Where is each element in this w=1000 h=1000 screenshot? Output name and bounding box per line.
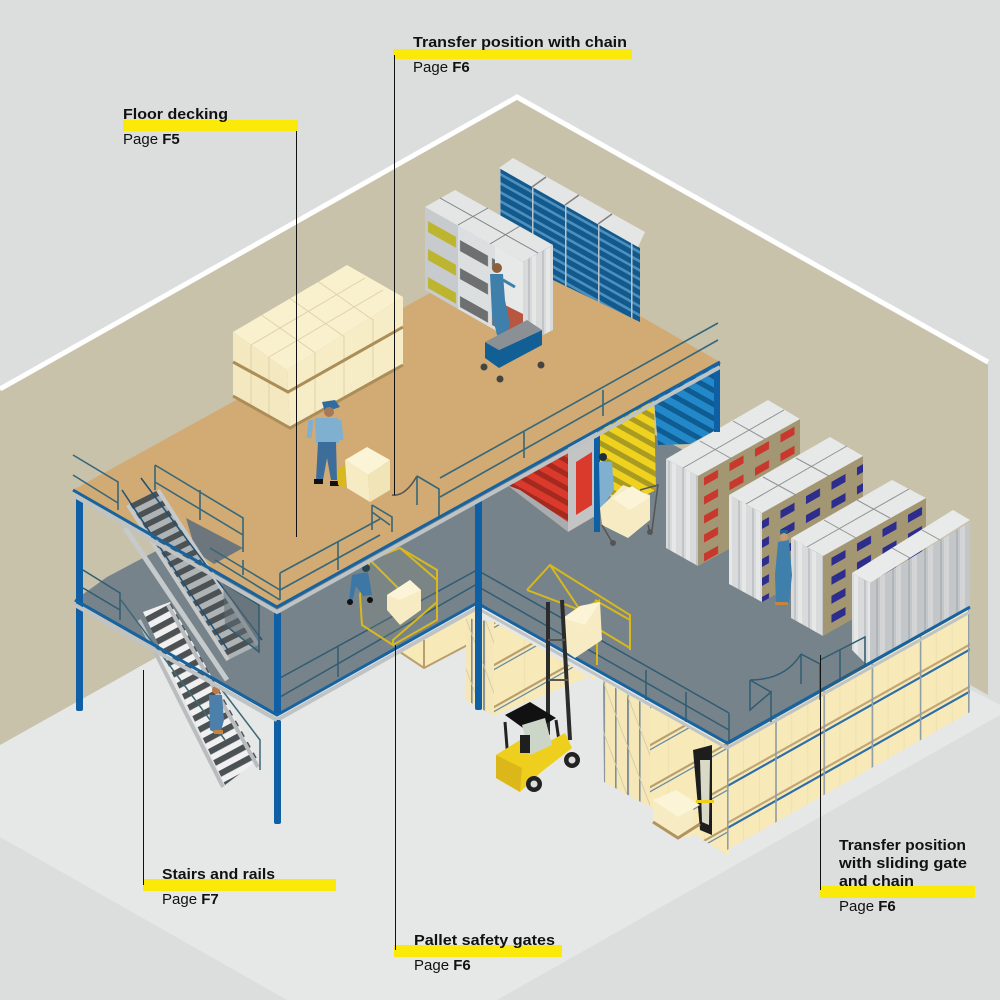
label: transfer position with chain — [393, 34, 632, 495]
label: stairs and rails — [143, 670, 336, 908]
label: pallet safety gates — [394, 645, 562, 974]
shelving with yellow and grey bins on deck — [425, 190, 553, 346]
label: transfer position with sliding gate and chain: with sliding gate — [838, 855, 967, 872]
row 4 shelving: end panels — [852, 510, 970, 668]
label: stairs and rails: Page F7 — [162, 891, 219, 908]
label: floor decking: Page F5 — [123, 131, 180, 148]
walkie stacker with pallet — [653, 745, 714, 838]
cart with boxes — [600, 485, 658, 546]
label: floor decking — [123, 106, 298, 537]
label: stairs and rails: Stairs and rails — [162, 866, 275, 883]
lower level rails — [83, 570, 865, 742]
worker at left gate — [347, 564, 373, 605]
worker at shelving row 2 — [775, 530, 792, 605]
stair opening in deck — [186, 518, 243, 564]
label: transfer position with chain: Transfer position with chain — [413, 34, 627, 51]
upper deck edge — [73, 362, 720, 612]
forklift load — [563, 602, 602, 658]
upper deck rails — [73, 323, 718, 600]
worker at shelves with cart — [490, 263, 515, 338]
shelving under the deck — [507, 364, 716, 532]
row 3 shelving: blue bins — [791, 480, 926, 636]
worker under deck — [599, 453, 614, 510]
wall top outline — [0, 97, 988, 389]
worker on stairs — [209, 686, 224, 735]
upper deck — [73, 245, 720, 607]
label: transfer position with sliding gate and chain — [820, 655, 975, 915]
pallet safety gate, right — [527, 565, 630, 665]
label: transfer position with sliding gate and chain: Transfer position — [839, 837, 966, 854]
stairs: upper flight — [122, 478, 262, 680]
cart with blue bins — [480, 320, 544, 382]
box on pallet jack — [345, 447, 390, 502]
lower deck edge — [75, 600, 970, 748]
label: transfer position with sliding gate and chain: and chain — [839, 873, 914, 890]
lower deck edge over stairs — [75, 600, 277, 720]
racks under deck, front face — [727, 607, 970, 850]
label: transfer position with sliding gate and chain: Page F6 — [839, 898, 896, 915]
worker with pallet jack — [309, 400, 345, 488]
forklift — [496, 600, 580, 792]
stacked pallets on deck — [233, 265, 403, 428]
label: transfer position with chain: Page F6 — [413, 59, 470, 76]
racks under deck, aisle group — [603, 681, 729, 856]
lower mezzanine level: grey deck — [75, 360, 970, 743]
shelving with blue bins on deck — [499, 158, 645, 322]
pallet safety gate, left — [360, 548, 437, 645]
stairs: lower flight — [121, 600, 260, 787]
right wall — [517, 100, 988, 695]
columns — [76, 362, 720, 824]
pallet box at left gate — [387, 580, 421, 625]
left wall — [0, 100, 517, 745]
racks under deck, left group — [400, 610, 595, 716]
label: floor decking: Floor decking — [123, 106, 228, 123]
label: pallet safety gates: Pallet safety gates — [414, 932, 555, 949]
label: pallet safety gates: Page F6 — [414, 957, 471, 974]
row 2 shelving: blue bins — [729, 437, 863, 602]
warehouse floor — [0, 455, 1000, 1000]
row 1 shelving: red bins — [666, 400, 800, 566]
